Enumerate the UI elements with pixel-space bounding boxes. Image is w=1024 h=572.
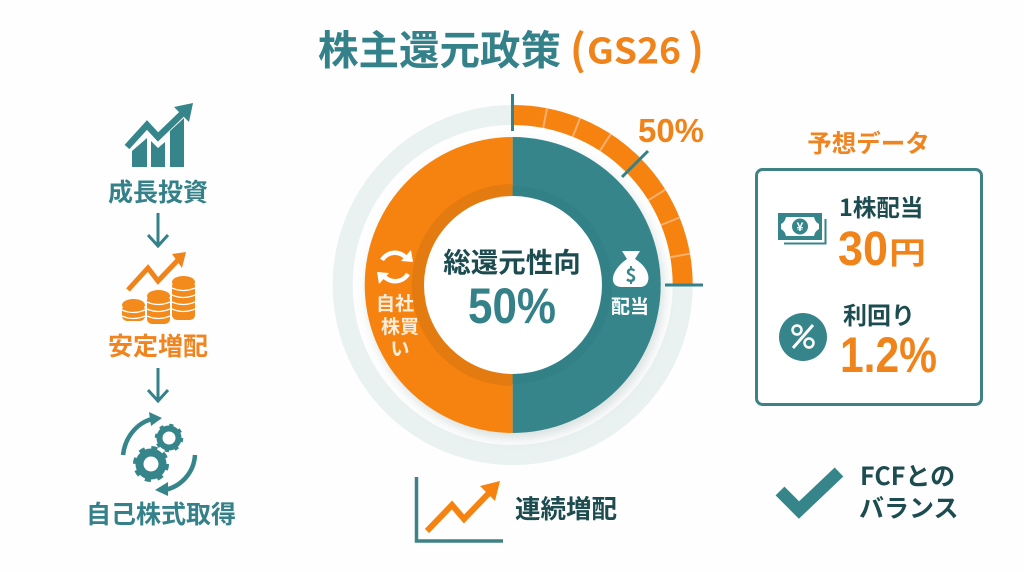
value: 30 yen: 30 [838,223,888,276]
centre label [443,240,581,334]
text: balance with FCF: FCFとの [860,457,955,493]
segment label: buyback: 自社 [376,289,414,316]
arrow [148,213,168,246]
segment label: buyback: 株買 [381,312,419,339]
icon: refresh arrows [377,250,413,284]
icon: banknote: ¥ [797,220,804,234]
left column: capital allocation flow [86,103,236,531]
icon: gears with cycle arrows [123,412,195,496]
icon: percent badge [779,313,827,361]
icon: growth chart [127,103,193,167]
arrow [148,368,168,401]
text: balance with FCF: バランス [859,489,959,525]
value: 30 yen: 円 [889,228,926,273]
icon: coins with rising arrow [122,252,195,324]
icon: check mark [780,472,839,510]
centre label: 総還元性向 [443,240,581,280]
centre hole [424,196,602,374]
outer arc: 50% gauge [512,94,703,285]
donut chart: total payout ratio [343,94,704,455]
heading: growth investment: 成長投資 [108,173,208,209]
text: yield: 利回り [843,296,915,331]
value: 1.2%: 1.2% [840,327,937,383]
segment label: buyback: い [390,334,410,361]
icon: money bag [613,251,648,288]
outer track ring [343,115,683,455]
panel: forecast data [756,170,982,404]
icon: rising line chart [416,477,503,541]
title: ( [570,17,586,78]
segment label: buyback [376,289,419,361]
segment: dividend 50% [513,137,661,433]
title [318,17,704,78]
title: ) [688,17,704,78]
gauge label: 50% [638,112,704,149]
text: dividend per share: 1株配当 [839,189,923,223]
icon: money bag: $ [625,261,637,288]
value: 30 yen [838,223,926,276]
title: GS26 [587,24,681,74]
inner shade band [412,184,513,386]
icon: banknote [778,213,826,244]
heading: share buyback: 自己株式取得 [86,495,236,531]
text: consecutive dividend increases: 連続増配 [515,489,617,526]
section heading: forecast data: 予想データ [807,125,930,160]
segment: buyback 50% [365,137,513,433]
heading: stable dividend growth: 安定増配 [108,327,208,363]
centre label: 50% [468,278,556,334]
segment label: dividend: 配当 [611,292,649,319]
text: balance with FCF [859,457,959,525]
title: 株主還元政策 [318,18,561,76]
